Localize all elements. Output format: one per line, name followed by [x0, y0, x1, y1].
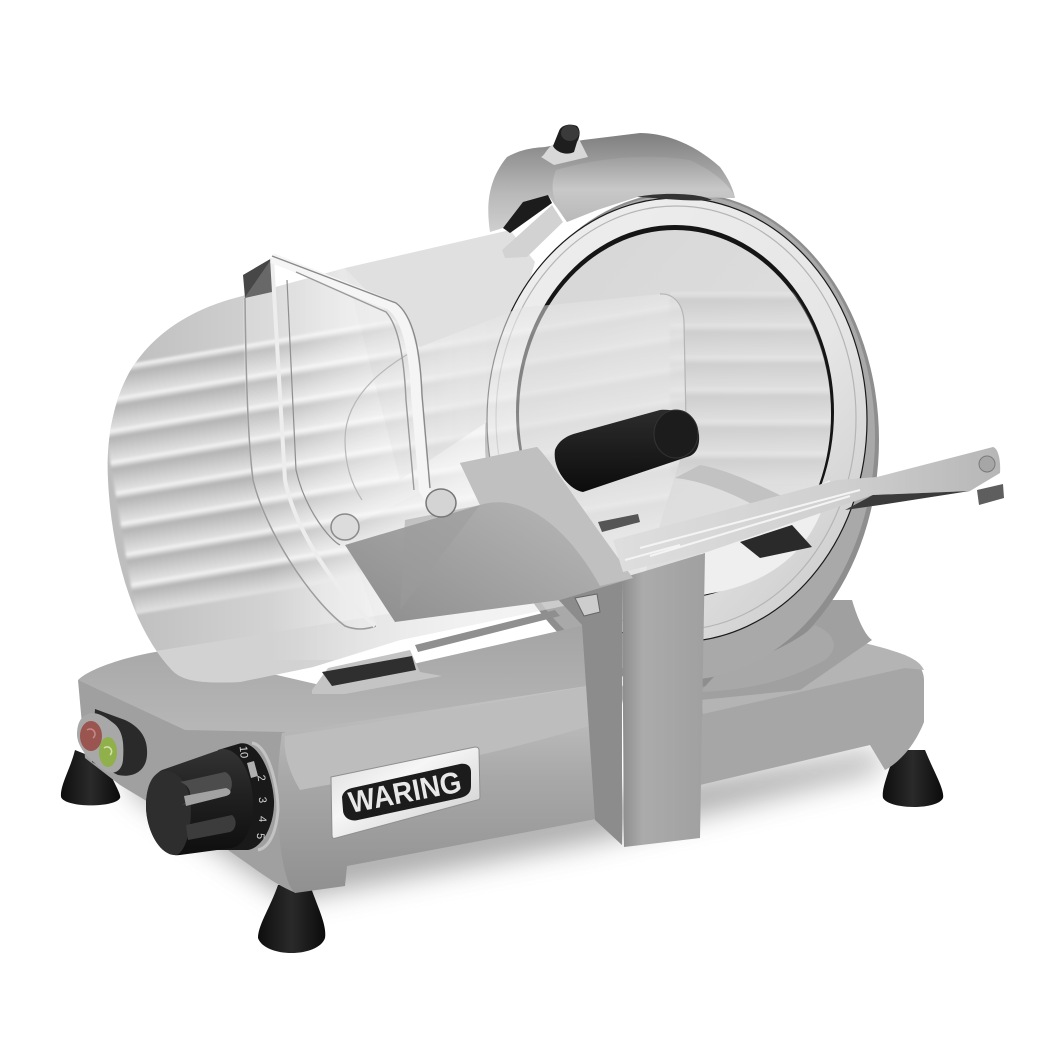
dial numbers: 5	[254, 832, 266, 840]
top knob mount	[541, 137, 588, 165]
dial numbers	[237, 745, 268, 840]
food pusher: clear guard	[243, 256, 437, 629]
logo wordmark: WARING	[346, 766, 464, 820]
top hood with knob	[488, 125, 735, 258]
black lever	[740, 525, 812, 558]
plate ribs	[108, 305, 562, 682]
logo badge	[331, 747, 480, 838]
dial numbers: 2	[254, 774, 267, 782]
blade housing: outer casing	[485, 192, 879, 700]
base front face	[278, 684, 612, 893]
blade disc	[516, 225, 840, 599]
logo pill	[342, 764, 471, 820]
thickness dial	[146, 743, 278, 855]
dial numbers: 3	[256, 796, 268, 804]
illustration: commercial meat slicer	[60, 124, 1004, 953]
dial numbers: 10	[237, 745, 250, 759]
hood front face	[553, 157, 735, 222]
thumb screw	[977, 484, 1004, 505]
base top surface	[78, 625, 625, 760]
dial scale	[215, 743, 274, 850]
blade ring	[487, 194, 875, 680]
product tray	[331, 447, 633, 622]
pusher pivots	[331, 489, 456, 540]
top knob	[553, 125, 580, 154]
rear plate section	[345, 230, 535, 480]
foot: rear right	[883, 750, 943, 807]
lower carriage rail	[415, 610, 560, 652]
column support	[555, 553, 705, 847]
bolt and bracket	[575, 594, 600, 616]
foot: rear left	[61, 750, 120, 805]
carriage slide clamp	[312, 650, 442, 694]
gauge arm	[613, 447, 1004, 572]
blade ribs	[676, 290, 831, 470]
carriage plate	[108, 268, 686, 682]
foot: front	[258, 885, 325, 953]
shadow under base	[130, 750, 880, 900]
red and green lamps	[77, 713, 123, 773]
black pusher handle	[555, 410, 699, 492]
knob body	[146, 749, 253, 855]
indicator switch housing	[77, 709, 147, 776]
base: main body	[78, 625, 625, 893]
base: right wing	[700, 636, 924, 785]
gauge rod and teeth	[598, 465, 800, 532]
light wash over right of plate	[308, 294, 685, 660]
dial numbers: 4	[256, 816, 268, 822]
base left side	[78, 680, 296, 893]
